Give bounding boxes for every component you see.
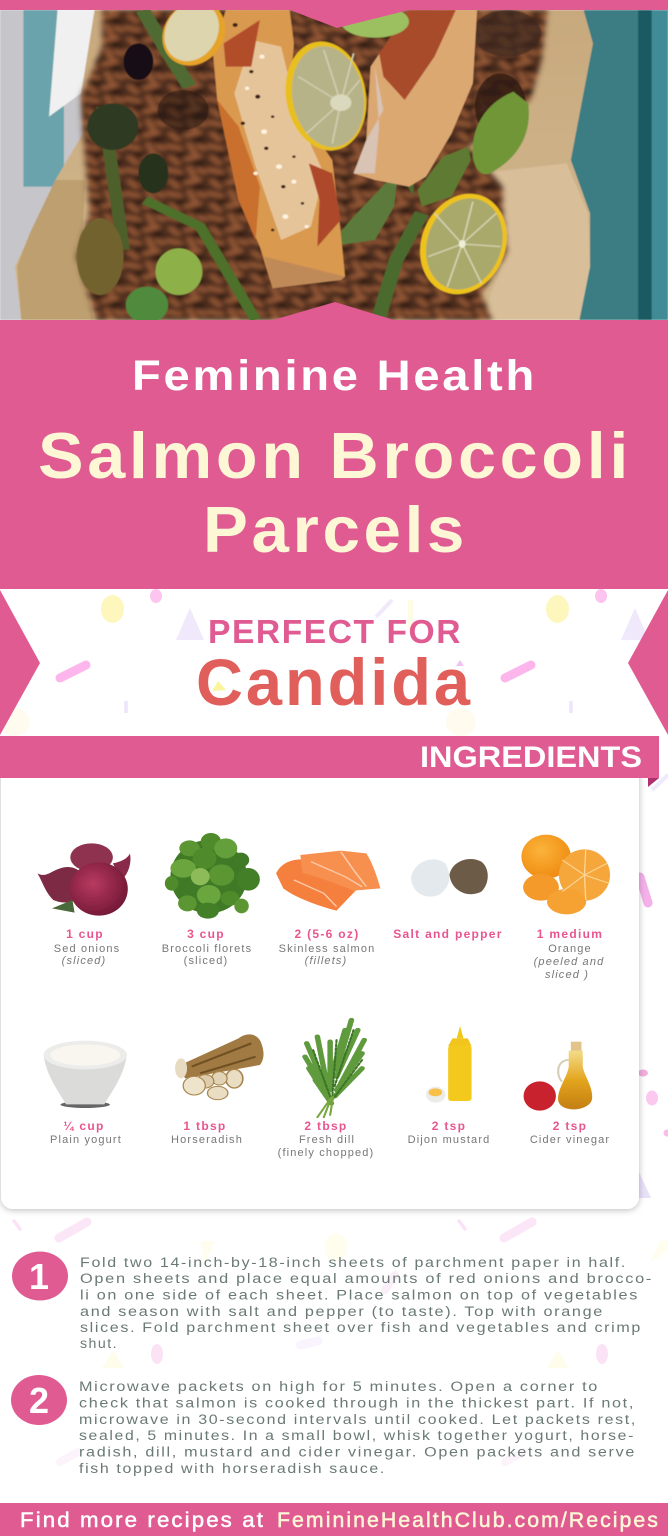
label: yogurt: ¼ cup — [63, 1119, 105, 1133]
label: dill: 2 tbsp — [304, 1119, 348, 1133]
label: red onions — [54, 927, 120, 967]
text: step 1 instructions: li on one side of each sheet. Place salmon on top of vegetables — [80, 1288, 639, 1302]
text: step 1 instructions: and season with salt and pepper (to taste). Top with orange — [80, 1304, 604, 1319]
text: step 2 instructions: Microwave packets on high for 5 minutes. Open a corner to — [79, 1379, 599, 1394]
heading: Salmon Broccoli Parcels — [38, 419, 632, 566]
ribbon ends — [0, 590, 668, 735]
hero photo: salmon parcels on parchment — [0, 0, 668, 323]
ingredient row 1 — [37, 833, 610, 981]
label: red onions: 1 cup — [66, 927, 104, 941]
salmon fillets — [213, 10, 345, 288]
label: orange: Orange — [548, 943, 592, 955]
icon: fresh dill — [305, 1020, 364, 1117]
label: orange: (peeled and — [534, 956, 604, 968]
label: red onions: Sed onions — [54, 943, 120, 955]
label: broccoli: 3 cup — [187, 927, 225, 941]
label: mustard — [408, 1119, 490, 1146]
step 2 — [11, 1375, 637, 1476]
badge: 1: 1 — [29, 1256, 49, 1297]
icon: red onions — [37, 843, 130, 916]
text: step 1 instructions: Open sheets and place equal amounts of red onions and brocco- — [80, 1271, 653, 1286]
label: mustard: 2 tsp — [432, 1119, 466, 1133]
label: orange: 1 medium — [537, 927, 603, 941]
label: salt and pepper: Salt and pepper — [393, 927, 503, 941]
text: step 2 instructions: sealed, 5 minutes. In a small bowl, whisk together yogurt, horse- — [79, 1428, 635, 1443]
ingredient row 2 — [43, 1020, 610, 1159]
label: broccoli: Broccoli florets — [162, 943, 252, 955]
label: yogurt: Plain yogurt — [50, 1134, 122, 1146]
confetti pattern: banner and page — [0, 589, 668, 1462]
lemons — [162, 10, 226, 66]
rice and vegetables base — [77, 10, 547, 320]
heading: Salmon Broccoli Parcels: Salmon Broccoli — [38, 419, 632, 492]
icon: yogurt bowl — [43, 1041, 127, 1108]
label: horseradish: 1 tbsp — [183, 1119, 227, 1133]
icon: salt and pepper — [411, 859, 488, 897]
text: step 2 instructions: fish topped with horseradish sauce. — [79, 1461, 386, 1476]
label: orange — [534, 927, 604, 981]
icon: mustard bottle — [426, 1026, 472, 1103]
text: step 2 instructions: radish, dill, mustard and cider vinegar. Open packets and serve — [79, 1444, 636, 1460]
label: vinegar: 2 tsp — [553, 1119, 587, 1133]
label: dill — [278, 1119, 374, 1159]
label: mustard: Dijon mustard — [408, 1134, 490, 1146]
text: step 1 instructions: shut. — [80, 1336, 118, 1351]
text: step 1 instructions: slices. Fold parchment sheet over fish and vegetables and crimp — [80, 1320, 642, 1335]
step 1 — [12, 1252, 653, 1351]
label: vinegar — [530, 1119, 610, 1146]
label: broccoli — [162, 927, 252, 967]
label: horseradish — [171, 1119, 243, 1146]
heading: Perfect for: PERFECT FOR — [208, 613, 462, 650]
label: vinegar: Cider vinegar — [530, 1134, 610, 1146]
label: red onions: (sliced) — [62, 955, 106, 967]
label: dill: (finely chopped) — [278, 1147, 374, 1159]
label: salmon: 2 (5-6 oz) — [294, 927, 360, 941]
footer bar — [0, 1503, 668, 1536]
label: horseradish: Horseradish — [171, 1134, 243, 1146]
text: step 1 instructions — [80, 1255, 653, 1351]
heading: Candida: Candida — [196, 645, 473, 719]
ingredients card — [1, 770, 639, 1209]
footer text — [20, 1509, 660, 1532]
text: step 2 instructions — [79, 1379, 637, 1476]
title band — [0, 302, 668, 589]
label: broccoli: (sliced) — [184, 955, 228, 967]
top pink bar with notch — [0, 0, 668, 28]
footer text: Find more recipes at — [20, 1509, 265, 1532]
heading: Salmon Broccoli Parcels: Parcels — [203, 493, 468, 566]
icon: apple and cider vinegar — [524, 1042, 592, 1111]
text: step 2 instructions: check that salmon is cooked through in the thickest part. If not, — [79, 1396, 635, 1410]
label: dill: Fresh dill — [299, 1134, 355, 1146]
label: orange: sliced ) — [545, 969, 589, 981]
text: step 2 instructions: microwave in 30-second intervals until cooked. Let packets rest, — [79, 1412, 637, 1427]
ingredients header bar — [0, 736, 659, 787]
icon: horseradish — [175, 1034, 264, 1100]
label: salmon — [279, 927, 375, 967]
greens — [143, 10, 190, 87]
heading: Ingredients: INGREDIENTS — [420, 741, 642, 774]
label: yogurt — [50, 1119, 122, 1146]
text: step 1 instructions: Fold two 14-inch-by-18-inch sheets of parchment paper in half. — [80, 1255, 627, 1270]
badge: 2 — [11, 1375, 67, 1425]
label: salmon: (fillets) — [305, 955, 347, 967]
badge: 2: 2 — [29, 1380, 49, 1421]
icon: orange — [521, 835, 610, 914]
label: salmon: Skinless salmon — [279, 943, 375, 955]
icon: broccoli — [165, 833, 260, 919]
badge: 1 — [12, 1252, 68, 1300]
heading: Feminine Health: Feminine Health — [132, 352, 537, 400]
parchment — [15, 10, 593, 320]
footer text: FeminineHealthClub.com/Recipes — [277, 1509, 660, 1532]
icon: salmon fillets — [276, 851, 380, 911]
